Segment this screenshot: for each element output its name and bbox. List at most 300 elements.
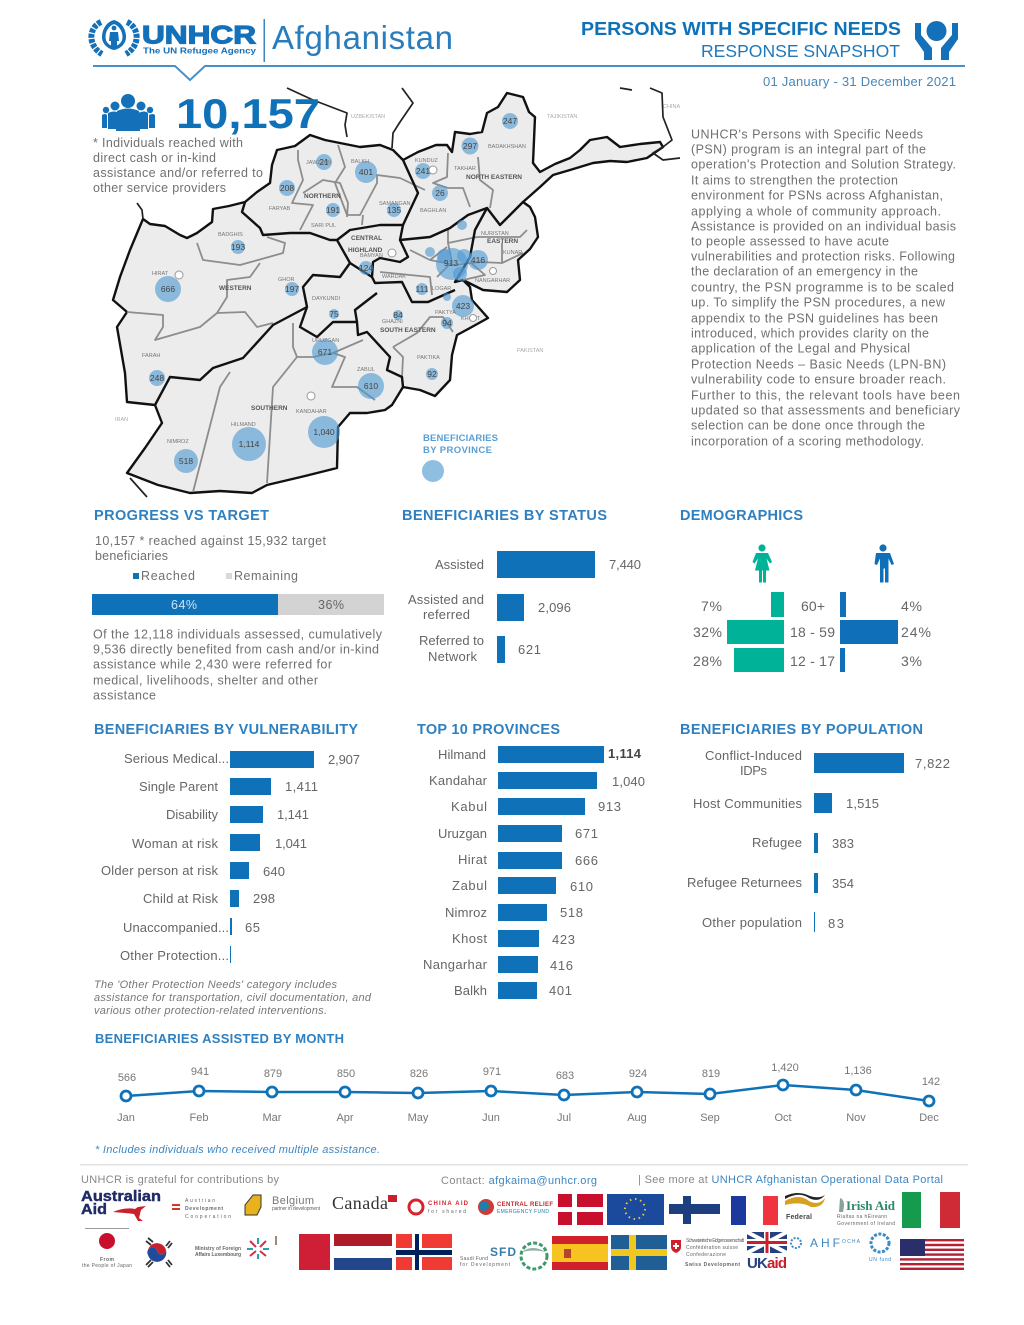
bar chart: Other population bbox=[702, 915, 802, 930]
population pyramid: 24% bbox=[901, 624, 931, 640]
flag: Finland bbox=[669, 1196, 720, 1224]
bubble values: 671 bbox=[318, 347, 332, 357]
logo: Canada: Canada bbox=[332, 1193, 388, 1213]
flag: Norway bbox=[396, 1234, 452, 1270]
bar chart: 423 bbox=[552, 932, 575, 947]
logo: Swiss cooperation: Confederazione bbox=[686, 1252, 726, 1258]
logo: Germany: Federal bbox=[786, 1214, 812, 1221]
logo: China aid bbox=[409, 1200, 469, 1215]
progress bar: 36% bbox=[318, 598, 344, 612]
summary bbox=[95, 534, 327, 563]
line chart: Apr bbox=[336, 1112, 354, 1124]
bar chart: Other Protection... bbox=[120, 948, 229, 963]
bar chart: Uruzgan bbox=[438, 826, 487, 841]
narrative text: (PSN) program is an integral part of the bbox=[691, 142, 926, 156]
bar chart: 354 bbox=[832, 876, 854, 891]
bar chart: IDPs bbox=[740, 763, 768, 778]
beneficiary bubbles bbox=[149, 113, 518, 473]
province names: LOGAR bbox=[432, 286, 451, 292]
note: * Individuals reached with bbox=[93, 136, 243, 150]
bubble values: 92 bbox=[427, 369, 437, 379]
province names: GHAZNI bbox=[382, 319, 403, 325]
province names: FARYAB bbox=[269, 206, 291, 212]
population pyramid: 18 - 59 bbox=[790, 624, 835, 640]
header rule with chevron bbox=[93, 66, 965, 80]
line chart: 850 bbox=[337, 1068, 355, 1080]
flag: Republic of Korea bbox=[146, 1238, 172, 1267]
bar chart: Refugee Returnees bbox=[687, 875, 802, 890]
bar chart: 7,822 bbox=[915, 756, 950, 771]
note bbox=[94, 979, 372, 1017]
paragraph: assistance bbox=[93, 688, 156, 702]
logo: UN agency emblem: UN fund bbox=[869, 1257, 891, 1263]
bar chart: referred bbox=[423, 607, 470, 622]
bar chart: Older person at risk bbox=[101, 863, 218, 878]
bubble values: 610 bbox=[364, 381, 378, 391]
bubble values: 913 bbox=[444, 258, 458, 268]
legend: Reached bbox=[141, 569, 195, 583]
logo: CERF: EMERGENCY FUND bbox=[497, 1209, 549, 1215]
bar chart: Disability bbox=[166, 807, 218, 822]
province names: PAKTIKA bbox=[417, 355, 440, 361]
flag: red block bbox=[299, 1234, 330, 1270]
line chart bbox=[117, 1062, 940, 1124]
neighbouring country names: CHINA bbox=[663, 104, 680, 110]
panel: top 10 provinces bbox=[417, 722, 645, 999]
narrative text: updated so that assessments and beneficiary bbox=[691, 404, 961, 418]
logo: Saudi Fund SFD: Saudi Fund bbox=[460, 1256, 488, 1262]
panel: beneficiaries by population bbox=[680, 722, 950, 932]
province names: SAMANGAN bbox=[379, 201, 411, 207]
bar chart: 1,515 bbox=[846, 796, 879, 811]
line chart: 683 bbox=[556, 1070, 574, 1082]
logo: Luxembourg: Affairs Luxembourg bbox=[195, 1252, 241, 1258]
bar chart: Unaccompanied... bbox=[123, 920, 229, 935]
panel: beneficiaries by status bbox=[402, 508, 641, 664]
flag: United States bbox=[900, 1239, 964, 1270]
narrative text: It aims to strengthen the protection bbox=[691, 174, 898, 188]
logo: Irish Aid: Rialtas na hÉireann bbox=[837, 1213, 887, 1220]
line chart: 941 bbox=[191, 1066, 209, 1078]
header bbox=[91, 19, 965, 89]
line chart: 1,136 bbox=[844, 1065, 872, 1077]
map legend: BY PROVINCE bbox=[423, 445, 492, 456]
bubble values: 208 bbox=[280, 183, 294, 193]
logo: Luxembourg: Ministry of Foreign bbox=[195, 1246, 241, 1252]
narrative text: country, the PSN programme is to be scaled bbox=[691, 280, 954, 294]
bar chart: Assisted and bbox=[408, 592, 484, 607]
bar chart: 1,040 bbox=[612, 774, 645, 789]
logo: Saudi Fund SFD: for Development bbox=[460, 1262, 511, 1268]
heading: BENEFICIARIES ASSISTED BY MONTH bbox=[95, 1031, 344, 1046]
bubble values: 1,040 bbox=[313, 427, 335, 437]
province names: DAYKUNDI bbox=[312, 296, 340, 302]
narrative text: applying a whole of community approach. bbox=[691, 204, 941, 218]
narrative text: appendix to the PSN guidelines has been bbox=[691, 312, 938, 326]
logo: CERF: CENTRAL RELIEF bbox=[497, 1202, 553, 1208]
headline figure bbox=[93, 90, 320, 195]
logo: Austrian Development Cooperation bbox=[172, 1198, 231, 1220]
logo: Azerbaijan emblem bbox=[245, 1195, 261, 1215]
bubble values: 135 bbox=[387, 205, 401, 215]
legend bbox=[133, 569, 298, 583]
bar chart: 1,411 bbox=[285, 779, 318, 794]
region names: SOUTH EASTERN bbox=[380, 327, 436, 334]
bar chart: Kandahar bbox=[429, 773, 488, 788]
logo: Japan bbox=[82, 1228, 132, 1269]
bar chart: Conflict-Induced bbox=[705, 748, 802, 763]
logo: Luxembourg bbox=[195, 1236, 277, 1259]
logo: Belgium: partner in development bbox=[272, 1206, 321, 1212]
logo: Saudi Fund SFD: SFD bbox=[490, 1245, 516, 1259]
bar chart: 640 bbox=[263, 864, 285, 879]
flag: Denmark bbox=[558, 1194, 603, 1225]
region names bbox=[219, 174, 522, 412]
bar chart: 65 bbox=[245, 920, 260, 935]
province names: BAGHLAN bbox=[420, 208, 446, 214]
logo: Australian Aid: Australian bbox=[81, 1188, 161, 1205]
heading: BENEFICIARIES BY VULNERABILITY bbox=[94, 722, 358, 738]
population pyramid bbox=[693, 592, 931, 672]
map outer shape bbox=[113, 93, 663, 493]
region borders bbox=[155, 160, 523, 405]
bar chart: Nangarhar bbox=[423, 957, 488, 972]
logo: Australian Aid: Aid bbox=[81, 1201, 107, 1218]
logo: CERF bbox=[478, 1199, 553, 1215]
line chart: Nov bbox=[846, 1112, 866, 1124]
line chart: 924 bbox=[629, 1068, 647, 1080]
bar chart: Zabul bbox=[452, 878, 487, 893]
line chart: Dec bbox=[919, 1112, 939, 1124]
paragraph: 9,536 directly benefited from cash and/or in-kind bbox=[93, 642, 379, 656]
province names: BAMYAN bbox=[360, 253, 383, 259]
bubble values: 1,114 bbox=[239, 439, 260, 449]
population pyramid: 4% bbox=[901, 598, 922, 614]
logo: UK aid: UKaid bbox=[747, 1255, 787, 1272]
bar chart: 416 bbox=[550, 958, 573, 973]
bar chart: 1,141 bbox=[277, 807, 309, 822]
heading: BENEFICIARIES BY POPULATION bbox=[680, 722, 923, 738]
bar chart: 383 bbox=[832, 836, 854, 851]
line chart: Aug bbox=[627, 1112, 647, 1124]
province names: WARDAK bbox=[382, 274, 406, 280]
data portal link: | See more at UNHCR Afghanistan Operational Data Portal bbox=[638, 1174, 943, 1186]
neighbouring country borders bbox=[130, 88, 680, 497]
bar chart: Assisted bbox=[435, 557, 484, 572]
logo: UN agency emblem bbox=[869, 1234, 891, 1263]
logo: Japan: the People of Japan bbox=[82, 1263, 132, 1269]
date range: 01 January - 31 December 2021 bbox=[763, 74, 956, 89]
city markers bbox=[175, 166, 496, 400]
logo: China aid: CHINA AID bbox=[428, 1201, 469, 1207]
donor logos bbox=[81, 1188, 964, 1272]
line chart: Mar bbox=[263, 1112, 282, 1124]
province names: NANGARHAR bbox=[475, 278, 510, 284]
logo: China aid: for shared bbox=[428, 1209, 466, 1215]
contributions line: UNHCR is grateful for contributions by bbox=[81, 1174, 280, 1186]
progress bar bbox=[92, 594, 384, 615]
narrative text: operation's Protection and Solution Strategy. bbox=[691, 158, 956, 172]
bar chart: 913 bbox=[598, 799, 621, 814]
population pyramid: 60+ bbox=[801, 598, 825, 614]
population pyramid: 3% bbox=[901, 653, 922, 669]
logo: Saudi Fund SFD bbox=[460, 1243, 547, 1269]
flag: Italy bbox=[902, 1192, 960, 1228]
logo: UK aid bbox=[747, 1232, 787, 1272]
province names: HIRAT bbox=[152, 271, 169, 277]
narrative text: selection can be done once through the bbox=[691, 418, 925, 432]
bar chart bbox=[423, 746, 645, 999]
line chart: 879 bbox=[264, 1068, 282, 1080]
icon: woman bbox=[752, 544, 772, 582]
paragraph: Of the 12,118 individuals assessed, cumulatively bbox=[93, 628, 383, 642]
bar chart: 666 bbox=[575, 853, 598, 868]
logo: Belgium bbox=[272, 1195, 321, 1212]
narrative text: application of the Legal and Physical bbox=[691, 342, 910, 356]
bar chart: Khost bbox=[452, 931, 487, 946]
bar chart: Kabul bbox=[451, 799, 487, 814]
logo: Irish Aid: Irish Aid bbox=[846, 1198, 896, 1213]
note bbox=[93, 136, 263, 195]
logo: AHF bbox=[791, 1236, 861, 1250]
province names: BALKH bbox=[351, 159, 369, 165]
population pyramid: 7% bbox=[701, 598, 722, 614]
logo: Japan: From bbox=[100, 1257, 115, 1263]
paragraph: medical, livelihoods, shelter and other bbox=[93, 674, 318, 688]
bubble values: 666 bbox=[161, 284, 175, 294]
province names: BADAKHSHAN bbox=[488, 144, 526, 150]
line chart: Sep bbox=[700, 1112, 720, 1124]
line chart: May bbox=[408, 1112, 429, 1124]
region names: EASTERN bbox=[487, 238, 518, 245]
logo: Swiss cooperation: Schweizerische Eidgenossenschaft bbox=[686, 1238, 745, 1244]
neighbouring country names: UZBEKISTAN bbox=[351, 114, 385, 120]
bubble values: 111 bbox=[416, 284, 429, 294]
region names: SOUTHERN bbox=[251, 405, 288, 412]
bubble values: 193 bbox=[231, 242, 245, 252]
bubble values: 416 bbox=[471, 255, 485, 265]
bubble values: 518 bbox=[179, 456, 193, 466]
population pyramid: 32% bbox=[693, 624, 722, 640]
heading: persons with specific needs: PERSONS WITH SPECIFIC NEEDS bbox=[581, 19, 901, 39]
neighbouring country names bbox=[115, 104, 680, 423]
neighbouring country names: TAJIKISTAN bbox=[547, 114, 577, 120]
divider line bbox=[264, 19, 265, 62]
heading: BENEFICIARIES BY STATUS bbox=[402, 508, 607, 524]
panel: progress vs target bbox=[92, 508, 384, 702]
narrative text: the declaration of an emergency in the bbox=[691, 264, 918, 278]
note: assistance for transportation, civil documentation, and bbox=[94, 992, 372, 1004]
bubble values bbox=[150, 116, 517, 466]
paragraph bbox=[93, 628, 383, 702]
paragraph: assistance while 2,430 were referred for bbox=[93, 658, 332, 672]
bubble values: 423 bbox=[456, 301, 470, 311]
map: beneficiaries by province bbox=[113, 88, 680, 497]
legend: Remaining bbox=[234, 569, 298, 583]
logo: Belgium: Belgium bbox=[272, 1195, 314, 1207]
bubble values: 26 bbox=[435, 188, 445, 198]
icon: group of people bbox=[102, 94, 155, 131]
bar chart: 2,096 bbox=[538, 600, 571, 615]
heading: PROGRESS VS TARGET bbox=[94, 508, 269, 524]
bar chart bbox=[408, 551, 641, 664]
line chart: Feb bbox=[190, 1112, 208, 1124]
narrative text: Assistance is provided on an individual basis bbox=[691, 220, 956, 234]
logo: Australian Aid bbox=[81, 1188, 161, 1221]
line chart: 971 bbox=[483, 1066, 501, 1078]
bar chart: Network bbox=[428, 649, 478, 664]
province names: SARI PUL bbox=[311, 223, 336, 229]
bar chart: 1,041 bbox=[275, 836, 307, 851]
bubble values: 124 bbox=[359, 263, 373, 273]
logo: Irish Aid bbox=[837, 1198, 896, 1227]
province names: HILMAND bbox=[231, 422, 256, 428]
bubble values: 241 bbox=[416, 166, 430, 176]
line chart: 819 bbox=[702, 1068, 720, 1080]
bubble values: 94 bbox=[442, 318, 452, 328]
province names bbox=[142, 144, 526, 445]
logo: Austrian Development Cooperation: Austrian bbox=[185, 1198, 215, 1204]
narrative text: environment for PSNs across Afghanistan, bbox=[691, 188, 943, 202]
narrative text: incorporation of a scoring methodology. bbox=[691, 434, 924, 448]
progress bar: 64% bbox=[171, 598, 197, 612]
bar chart: Refugee bbox=[752, 835, 802, 850]
logo: AHF: AHF bbox=[810, 1236, 840, 1250]
flag: Netherlands bbox=[334, 1234, 392, 1270]
bar chart: 671 bbox=[575, 826, 598, 841]
neighbouring country names: IRAN bbox=[115, 417, 128, 423]
line chart: 1,420 bbox=[771, 1062, 799, 1074]
narrative text: introduced, which provides clarity on the bbox=[691, 326, 929, 340]
note: direct cash or in-kind bbox=[93, 151, 216, 165]
logo: Swiss cooperation: Confédération suisse bbox=[686, 1245, 738, 1251]
bar chart: 621 bbox=[518, 642, 541, 657]
narrative text: vulnerability code to ensure broader reach. bbox=[691, 372, 946, 386]
logo: Swiss cooperation bbox=[671, 1238, 745, 1268]
map legend: BENEFICIARIES bbox=[423, 433, 498, 444]
province names: URUZGAN bbox=[312, 338, 339, 344]
title: Afghanistan: Afghanistan bbox=[272, 19, 453, 56]
summary: beneficiaries bbox=[95, 549, 168, 563]
narrative text: UNHCR's Persons with Specific Needs bbox=[691, 128, 923, 142]
bubble values: 21 bbox=[319, 157, 329, 167]
bar chart: Single Parent bbox=[139, 779, 218, 794]
bar chart bbox=[101, 751, 360, 963]
bubble values: 84 bbox=[393, 310, 403, 320]
bar chart: 1,114 bbox=[608, 746, 642, 761]
bar chart: 7,440 bbox=[609, 557, 641, 572]
bar chart: Woman at risk bbox=[132, 836, 218, 851]
population pyramid: 12 - 17 bbox=[790, 653, 835, 669]
logo: Canada flag mark bbox=[388, 1195, 397, 1202]
region names: WESTERN bbox=[219, 285, 252, 292]
bar chart: Serious Medical... bbox=[124, 751, 229, 766]
heading: TOP 10 PROVINCES bbox=[417, 722, 560, 738]
flag: France bbox=[731, 1196, 778, 1225]
bar chart: Hilmand bbox=[438, 747, 486, 762]
population pyramid: 28% bbox=[693, 653, 722, 669]
summary: 10,157 * reached against 15,932 target bbox=[95, 534, 327, 548]
line chart: Jan bbox=[117, 1112, 135, 1124]
bar chart: 401 bbox=[549, 983, 572, 998]
province names: NURISTAN bbox=[481, 231, 509, 237]
bubble values: 248 bbox=[150, 373, 164, 383]
neighbouring country names: PAKISTAN bbox=[517, 348, 543, 354]
narrative text: up. To simplify the PSN procedures, a new bbox=[691, 296, 946, 310]
province names: KUNDUZ bbox=[415, 158, 439, 164]
line chart: Oct bbox=[774, 1112, 792, 1124]
logo wordmark bbox=[142, 22, 256, 56]
note: assistance and/or referred to bbox=[93, 166, 263, 180]
logo: Irish Aid: Government of Ireland bbox=[837, 1221, 895, 1227]
subheading: response snapshot: RESPONSE SNAPSHOT bbox=[701, 41, 900, 61]
logo: Germany bbox=[785, 1193, 825, 1221]
line chart: 826 bbox=[410, 1068, 428, 1080]
note: The 'Other Protection Needs' category includes bbox=[94, 979, 338, 991]
bubble values: 247 bbox=[503, 116, 517, 126]
bar chart: 2,907 bbox=[328, 752, 360, 767]
flag: Spain bbox=[552, 1236, 608, 1270]
bubble values: 401 bbox=[359, 167, 373, 177]
bar chart: Balkh bbox=[454, 983, 487, 998]
bar chart: Referred to bbox=[419, 633, 484, 648]
region names: HIGHLAND bbox=[348, 247, 383, 254]
province names: NIMROZ bbox=[167, 439, 189, 445]
province borders bbox=[127, 145, 527, 492]
line chart: Jul bbox=[557, 1112, 571, 1124]
contact: Contact: afgkaima@unhcr.org bbox=[441, 1175, 597, 1187]
logo: Austrian Development Cooperation: Development bbox=[185, 1206, 223, 1212]
region names: CENTRAL bbox=[351, 235, 382, 242]
logo wordmark: The UN Refugee Agency bbox=[143, 46, 256, 56]
note: various other protection-related interventions. bbox=[94, 1005, 327, 1017]
note: other service providers bbox=[93, 181, 226, 195]
bar chart: 518 bbox=[560, 905, 583, 920]
bar chart: Host Communities bbox=[693, 796, 802, 811]
icon: man bbox=[874, 544, 894, 582]
province names: BADGHIS bbox=[218, 232, 243, 238]
bar chart: Nimroz bbox=[445, 905, 487, 920]
flag: European Union bbox=[607, 1194, 664, 1225]
province names: KUNAR bbox=[503, 250, 522, 256]
region names: NORTH EASTERN bbox=[466, 174, 522, 181]
province names: TAKHAR bbox=[454, 166, 476, 172]
bar chart: 83 bbox=[828, 916, 844, 931]
narrative text: Further to this, the relevant tools have been bbox=[691, 388, 960, 402]
province names: GHOR bbox=[278, 277, 295, 283]
region names: NORTHERN bbox=[304, 193, 341, 200]
province names: KHOST bbox=[461, 316, 481, 322]
bar chart: Child at Risk bbox=[143, 891, 218, 906]
flag: Sweden bbox=[611, 1235, 667, 1270]
bubble values: 197 bbox=[285, 284, 299, 294]
bubble values: 75 bbox=[329, 309, 339, 319]
icon: UNHCR laurel logo bbox=[91, 20, 137, 54]
province names: JAWZJAN bbox=[306, 160, 331, 166]
bar chart: Hirat bbox=[458, 852, 487, 867]
logo: AHF: OCHA bbox=[842, 1239, 861, 1245]
icon: hands holding person bbox=[915, 21, 958, 60]
narrative text bbox=[691, 128, 961, 448]
bar chart: 298 bbox=[253, 891, 275, 906]
bar chart: 610 bbox=[570, 879, 593, 894]
line chart: 566 bbox=[118, 1072, 136, 1084]
big number: 10,157 bbox=[176, 90, 320, 137]
province names: ZABUL bbox=[357, 367, 375, 373]
footnote: * Includes individuals who received multiple assistance. bbox=[95, 1144, 380, 1156]
line chart: 142 bbox=[922, 1076, 940, 1088]
panel: beneficiaries by vulnerability bbox=[94, 722, 372, 1017]
